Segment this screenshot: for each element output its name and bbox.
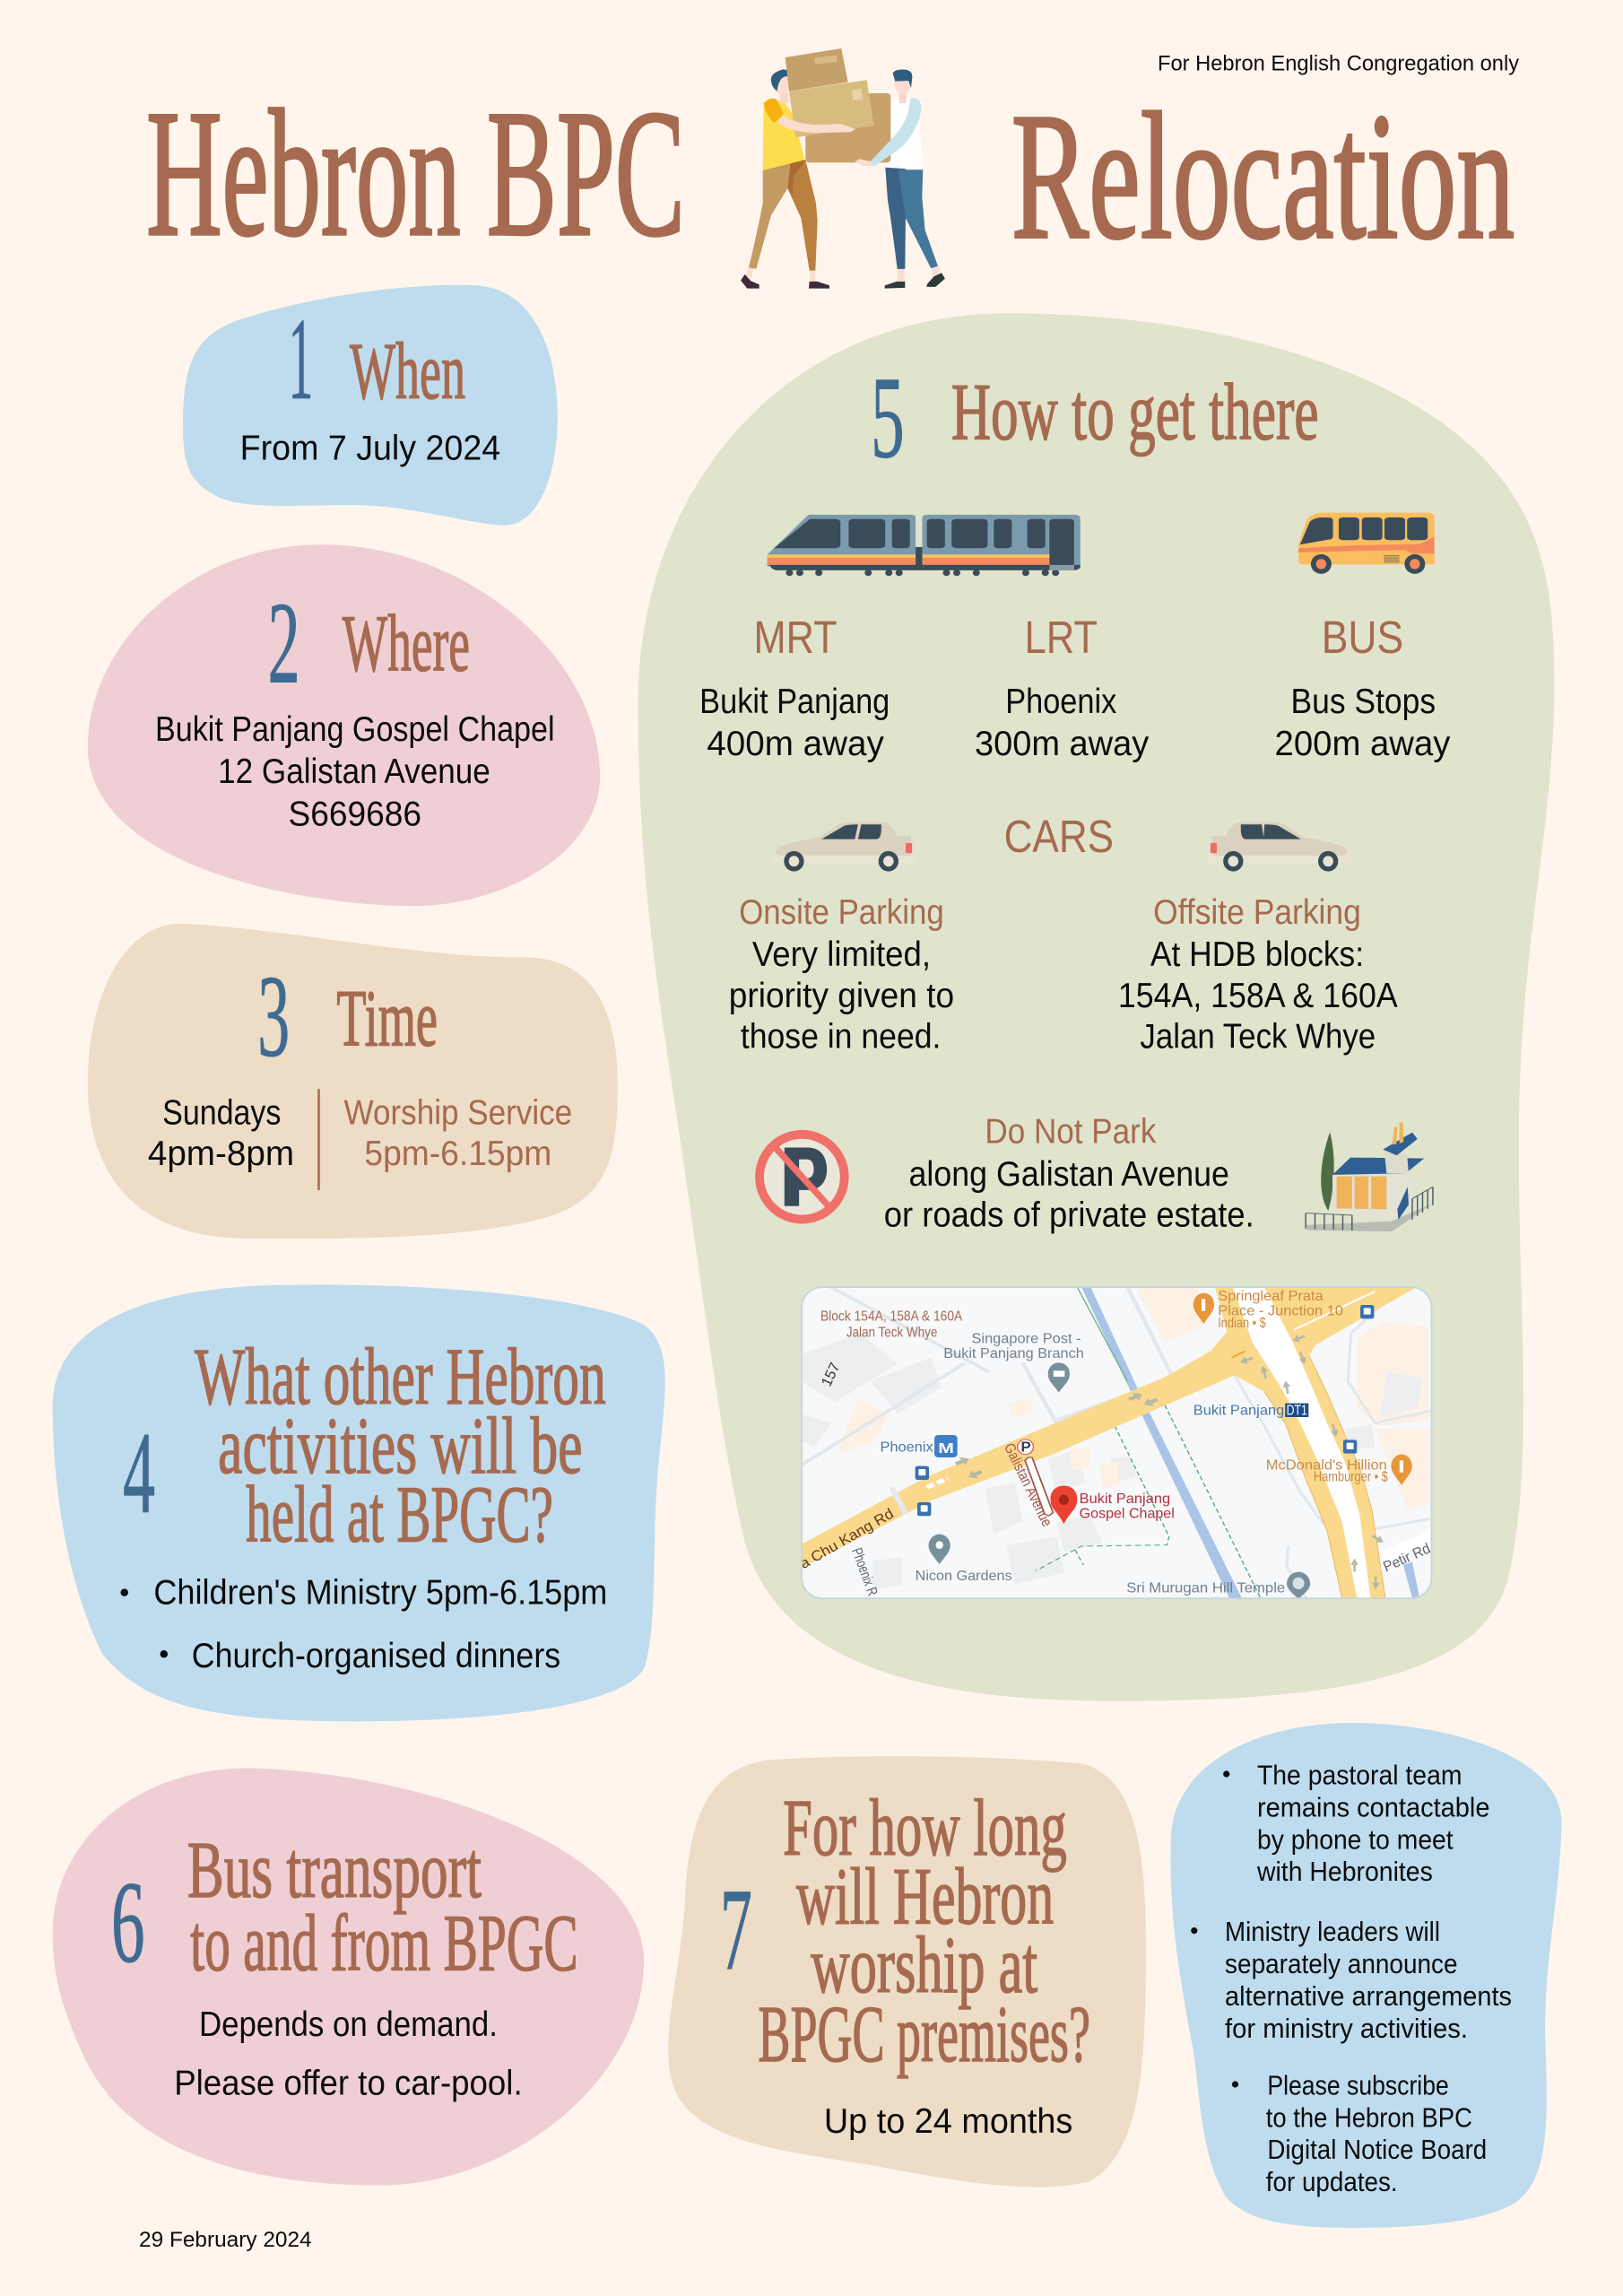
icon: house [1306, 1123, 1433, 1231]
panel 8: notes [1171, 1723, 1561, 2228]
activities list: Children's Ministry 5pm-6.15pm [153, 1574, 607, 1613]
map icons: DT1 [1287, 1402, 1307, 1418]
block: onsite parking: Onsite Parking [739, 893, 944, 932]
block: onsite parking: priority given to [729, 977, 954, 1015]
map labels: Hamburger • $ [1314, 1469, 1388, 1485]
note: congregation notice: For Hebron English Congregation only [1158, 51, 1520, 75]
duration text: Up to 24 months [824, 2102, 1072, 2141]
address [155, 710, 555, 833]
note: subscribe: for updates. [1266, 2166, 1398, 2197]
heading: bus transport [187, 1826, 578, 1988]
map roads: east side [1166, 1287, 1430, 1598]
address: S669686 [289, 795, 421, 833]
sunday hours: Sundays [162, 1093, 281, 1132]
worship service hours: Worship Service [344, 1093, 572, 1132]
map labels: Gospel Chapel [1080, 1506, 1175, 1522]
heading: other activities: What other Hebron [195, 1333, 606, 1422]
map labels: Bukit Panjang [1193, 1402, 1284, 1418]
column: MRT: 400m away [707, 725, 884, 763]
column: MRT: MRT [754, 612, 838, 663]
address: Bukit Panjang Gospel Chapel [155, 710, 555, 749]
icon: train [768, 515, 1081, 576]
column: bus: 200m away [1275, 725, 1451, 763]
note: ministry leaders [1191, 1916, 1512, 2044]
column: LRT [975, 612, 1150, 763]
note: ministry leaders: for ministry activities. [1225, 2013, 1468, 2044]
sunday hours: 4pm-8pm [148, 1135, 294, 1173]
map labels: Nicon Gardens [916, 1568, 1012, 1584]
map labels: Bukit Panjang Branch [943, 1345, 1084, 1361]
panel 4: other activities [53, 1284, 665, 1721]
heading: for how long: will Hebron [796, 1852, 1054, 1941]
icon: bus [1295, 513, 1438, 574]
map icons: M [938, 1440, 954, 1457]
date: 29 February 2024 [139, 2228, 312, 2252]
map labels: McDonald's Hillion [1266, 1457, 1387, 1473]
worship service hours [344, 1093, 572, 1173]
column: bus: Bus Stops [1291, 683, 1436, 721]
sunday hours [148, 1093, 294, 1173]
panel 5: how to get there [638, 313, 1554, 1701]
heading: for how long: BPGC premises? [758, 1990, 1090, 2079]
number 4: 4 [123, 1409, 155, 1538]
number 2: 2 [268, 579, 300, 709]
block: do not park: Do Not Park [985, 1113, 1157, 1152]
map labels: Bukit Panjang [1080, 1491, 1170, 1507]
bus transport text: Please offer to car-pool. [174, 2064, 523, 2102]
icon: galistan avenue road marker: P [1020, 1439, 1031, 1455]
column: LRT: 300m away [975, 725, 1150, 763]
note: ministry leaders: Ministry leaders will [1225, 1916, 1440, 1947]
note: subscribe: Please subscribe [1267, 2069, 1449, 2100]
map labels: Sri Murugan Hill Temple [1126, 1579, 1285, 1596]
map labels: Indian • $ [1218, 1315, 1266, 1331]
heading: for how long: worship at [811, 1921, 1037, 2010]
block: do not park: along Galistan Avenue [909, 1155, 1229, 1194]
note: subscribe [1232, 2069, 1487, 2197]
icon: no parking sign [759, 1135, 845, 1219]
block: offsite parking [1118, 893, 1398, 1057]
heading: where: Where [343, 599, 470, 688]
heading: when: When [350, 327, 465, 416]
heading: bus transport: Bus transport [187, 1826, 482, 1915]
block: offsite parking: Offsite Parking [1153, 893, 1361, 932]
title: Hebron BPC [146, 73, 685, 274]
heading: cars: CARS [1004, 811, 1114, 862]
column: LRT: Phoenix [1005, 683, 1117, 721]
heading: for how long: For how long [783, 1784, 1067, 1873]
icon: red location pin [1051, 1486, 1077, 1524]
heading: bus transport: to and from BPGC [190, 1900, 578, 1988]
worship service hours: 5pm-6.15pm [364, 1135, 551, 1173]
panel 2: where [88, 544, 600, 906]
heading: other activities: activities will be [218, 1402, 583, 1491]
icon: galistan avenue road marker [1018, 1439, 1053, 1516]
map labels: Jalan Teck Whye [846, 1325, 937, 1341]
panel 7: for how long [668, 1756, 1146, 2187]
heading: time: Time [336, 974, 438, 1063]
note: pastoral team: remains contactable [1257, 1791, 1489, 1822]
icon: car left [769, 822, 916, 872]
map road labels: Petir Rd [1381, 1540, 1433, 1575]
number 5: 5 [871, 353, 905, 483]
map road labels: Galistan Avenue [1001, 1440, 1055, 1529]
heading: for how long [758, 1784, 1090, 2079]
block: onsite parking [729, 893, 954, 1057]
map road labels: Phoenix R [848, 1546, 881, 1598]
column: LRT: LRT [1024, 612, 1098, 663]
panel 1: when [183, 285, 558, 526]
activities list: Church-organised dinners [192, 1637, 560, 1675]
heading: other activities [195, 1333, 606, 1560]
map labels: Singapore Post - [972, 1330, 1081, 1346]
number 7: 7 [720, 1866, 752, 1995]
panel 3: time [88, 924, 618, 1239]
activities list [120, 1574, 607, 1675]
map road labels [797, 1361, 1433, 1598]
block: onsite parking: Very limited, [752, 935, 931, 974]
column: MRT: Bukit Panjang [699, 683, 890, 721]
panel 1: when: 1 [289, 295, 313, 424]
icon: car right [1207, 822, 1353, 872]
block: offsite parking: 154A, 158A & 160A [1118, 977, 1398, 1015]
block: do not park: or roads of private estate. [884, 1196, 1254, 1235]
block: offsite parking: At HDB blocks: [1150, 935, 1364, 974]
map icons [916, 1293, 1412, 1599]
map labels: Block 154A, 158A & 160A [820, 1309, 962, 1325]
map labels [820, 1288, 1388, 1596]
heading: other activities: held at BPGC? [246, 1471, 553, 1560]
note: subscribe: Digital Notice Board [1267, 2134, 1487, 2165]
column: MRT [699, 612, 890, 763]
note: ministry leaders: separately announce [1225, 1948, 1458, 1979]
note: ministry leaders: alternative arrangements [1225, 1980, 1512, 2012]
map labels: Springleaf Prata [1218, 1288, 1324, 1304]
address: 12 Galistan Avenue [218, 752, 490, 791]
column: bus: BUS [1322, 612, 1403, 663]
map labels: Phoenix [881, 1439, 933, 1455]
block: offsite parking: Jalan Teck Whye [1140, 1018, 1376, 1057]
map [797, 1287, 1433, 1599]
date text: From 7 July 2024 [240, 429, 500, 467]
note: pastoral team: by phone to meet [1257, 1823, 1454, 1855]
bus transport text: Depends on demand. [199, 2005, 498, 2044]
note: pastoral team: with Hebronites [1256, 1856, 1433, 1887]
note: subscribe: to the Hebron BPC [1266, 2101, 1472, 2133]
bus transport text [174, 2005, 523, 2102]
map labels: Place - Junction 10 [1218, 1303, 1343, 1319]
map road labels: a Chu Kang Rd [797, 1506, 897, 1572]
note: pastoral team: The pastoral team [1257, 1759, 1462, 1790]
block: do not park [884, 1113, 1254, 1235]
block: onsite parking: those in need. [741, 1018, 941, 1057]
heading: how to get there: How to get there [951, 369, 1319, 457]
number 6: 6 [111, 1858, 145, 1987]
map road labels: 157 [819, 1361, 844, 1389]
panel 6: bus transport [53, 1768, 644, 2186]
number 3: 3 [257, 952, 290, 1082]
note: pastoral team [1223, 1759, 1489, 1887]
icon: two people carrying boxes [741, 48, 945, 289]
column: bus [1275, 612, 1451, 763]
title [146, 73, 1515, 276]
